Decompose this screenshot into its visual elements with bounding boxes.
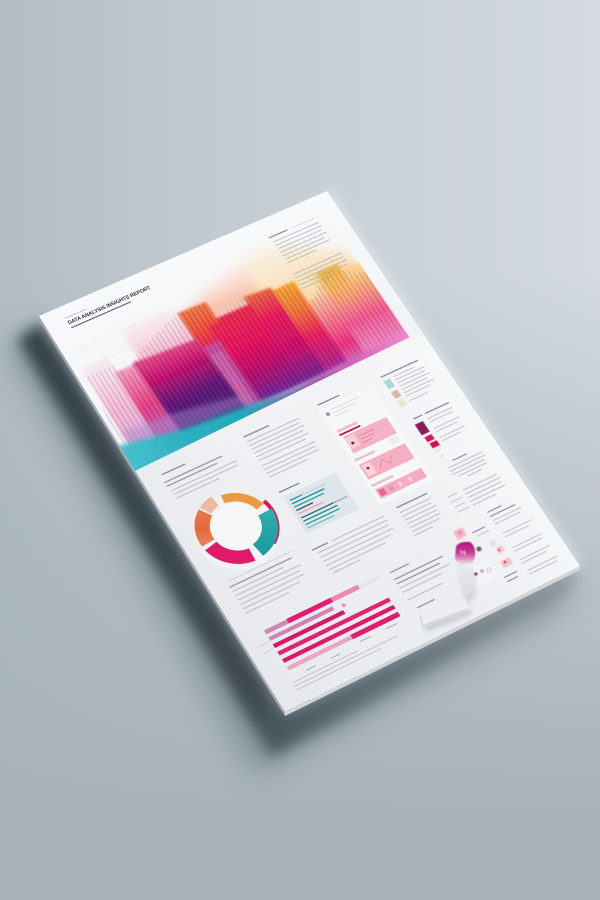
segment: crimson sliver	[251, 500, 289, 543]
icon: magenta sphere on glass stand	[455, 542, 476, 606]
bar row 5	[282, 605, 396, 663]
icon: small pink tile	[453, 527, 467, 540]
horizontal pink bar chart	[252, 575, 414, 694]
document page	[39, 191, 580, 712]
segment: coral	[193, 513, 221, 543]
section: intro text left	[160, 445, 242, 499]
glass button block	[420, 598, 472, 632]
bar stripes	[87, 270, 404, 446]
report title: DATA ANALYSIS INSIGHTS REPORT	[67, 288, 154, 326]
bar row 4	[277, 598, 391, 655]
segment: orange top	[223, 488, 260, 519]
top right intro text	[269, 216, 352, 288]
title block	[65, 282, 154, 328]
bar row 6	[286, 612, 401, 671]
icon: translucent legend card	[473, 559, 497, 586]
bar row 2	[268, 606, 334, 641]
teal mini chart card	[279, 468, 359, 535]
paragraph below teal card	[312, 515, 402, 575]
top row of small legend ticks	[158, 352, 410, 468]
faint peach glow	[237, 244, 371, 302]
note paragraphs right	[430, 447, 508, 512]
swatch cream	[397, 398, 407, 408]
swatch crimson	[424, 434, 435, 442]
coloured bars	[83, 261, 408, 445]
donut chart	[179, 481, 296, 584]
swatch red	[430, 440, 440, 448]
paragraph above bars	[226, 551, 312, 613]
icon: magenta sphere on glass stand: %	[460, 550, 466, 557]
paragraph bottom centre	[390, 549, 464, 610]
axis captions	[305, 624, 398, 670]
segment: teal	[241, 512, 282, 550]
pink card 1	[336, 410, 397, 454]
swatch teal	[383, 378, 395, 389]
segment: magenta	[211, 533, 252, 568]
peach bar stripes	[239, 227, 353, 292]
bar row 3	[273, 610, 345, 648]
lilac fade above band	[124, 394, 247, 443]
pink card 2	[352, 434, 415, 480]
swatch plum	[415, 421, 430, 435]
skyline bar chart hero	[68, 227, 410, 471]
segment: peach	[203, 501, 217, 511]
footnote lines	[292, 632, 400, 690]
pink card 3	[371, 463, 427, 499]
faint chart grid	[68, 306, 165, 370]
bar row 1	[264, 575, 380, 634]
faint salmon glow	[180, 268, 260, 319]
icon group: right small pink icons	[489, 539, 513, 568]
pink chart panel	[316, 381, 435, 506]
centre note column	[396, 493, 446, 535]
bottom right labels	[466, 498, 559, 585]
icon: dark dot	[476, 546, 482, 552]
swatch list top right	[381, 359, 441, 408]
teal baseline band	[118, 330, 410, 471]
swatch tan	[391, 390, 401, 399]
second key list right	[412, 402, 475, 458]
section: centre text	[244, 413, 322, 477]
panel header text	[325, 397, 363, 419]
